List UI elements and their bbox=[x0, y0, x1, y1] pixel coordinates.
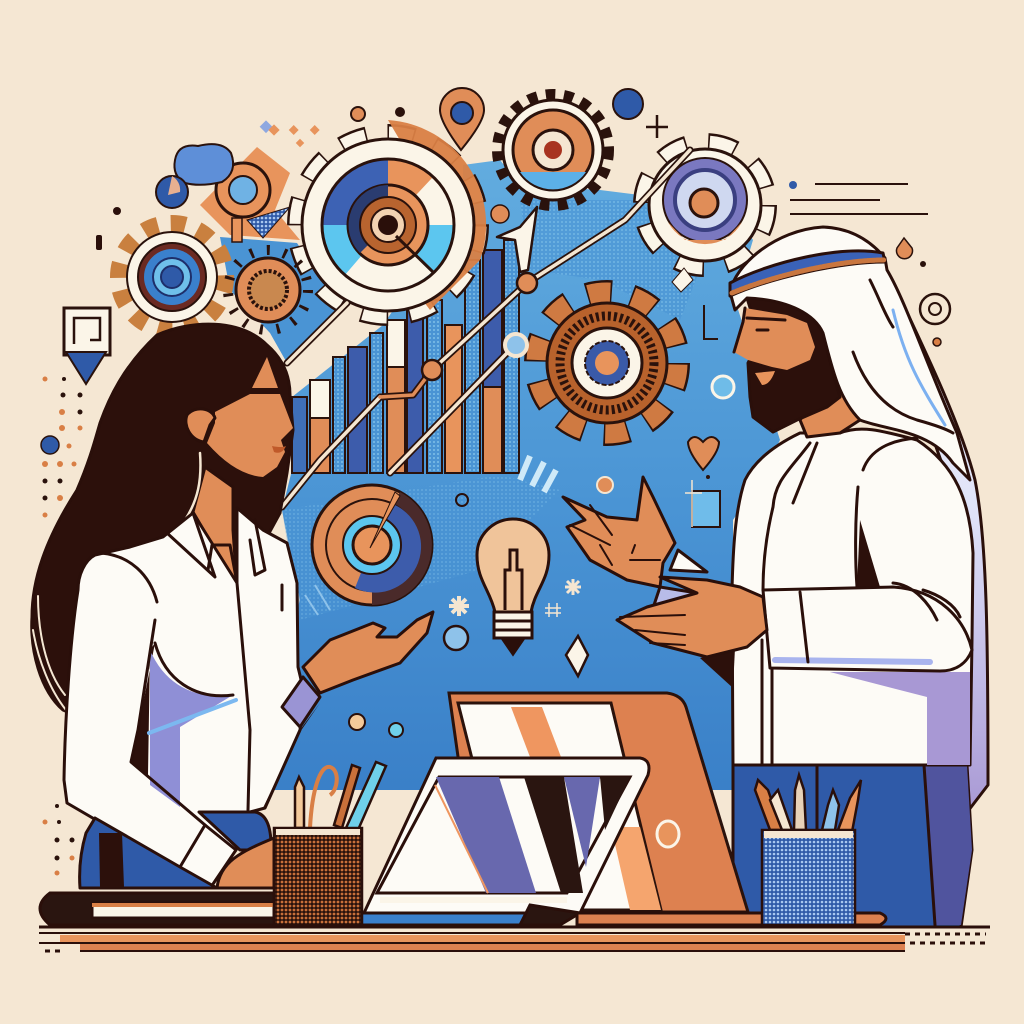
man bbox=[563, 227, 988, 927]
laptop front bbox=[364, 758, 649, 913]
woman neck and face bbox=[193, 467, 237, 587]
pencil cup right bbox=[755, 775, 861, 925]
woman ear bbox=[186, 409, 215, 442]
woman hair bbox=[32, 324, 293, 730]
gear: orange centre-right bbox=[539, 295, 675, 431]
icon: text lines upper right bbox=[789, 181, 928, 214]
icon: small symbols right bbox=[685, 238, 950, 527]
man cape bbox=[887, 270, 988, 815]
icon: map pin bbox=[440, 88, 484, 150]
gear: left white bbox=[122, 227, 222, 327]
gear: top right of centre bbox=[501, 98, 605, 202]
bar chart bbox=[292, 240, 519, 473]
gear: small orange bbox=[228, 250, 308, 330]
woman torso panel bbox=[131, 643, 155, 775]
gear: large centre bbox=[300, 120, 486, 313]
man hair and beard bbox=[747, 297, 840, 432]
pencil cup left bbox=[274, 762, 386, 925]
man lower hand shadow bbox=[700, 648, 735, 688]
man torso bbox=[732, 429, 973, 765]
man lower robe bbox=[733, 765, 972, 927]
trend lines bbox=[282, 150, 690, 507]
man neck bbox=[800, 375, 860, 437]
man face bbox=[734, 308, 815, 370]
gear: far right bbox=[647, 147, 763, 263]
blue backdrop bbox=[220, 160, 780, 790]
sparkle icons bbox=[305, 456, 613, 737]
man cuff bbox=[670, 550, 707, 572]
dots left bbox=[41, 376, 82, 876]
gear: upper left with cloud bbox=[156, 144, 300, 242]
woman hands bbox=[303, 612, 433, 693]
icon: square badge left bbox=[64, 308, 110, 384]
target icon bbox=[312, 485, 432, 605]
woman bbox=[32, 324, 433, 888]
tablet back bbox=[449, 693, 748, 912]
man headband bbox=[730, 251, 885, 296]
woman shirt bbox=[64, 508, 304, 887]
light bulb bbox=[477, 519, 549, 654]
man headdress bbox=[730, 227, 970, 480]
woman trousers bbox=[80, 818, 217, 888]
man hands bbox=[563, 477, 675, 587]
woman cuff bbox=[282, 677, 320, 727]
small decorative icons bbox=[96, 89, 693, 292]
woman sleeve gap bbox=[250, 703, 320, 812]
desk bbox=[39, 893, 990, 951]
man sleeve bbox=[763, 587, 972, 671]
